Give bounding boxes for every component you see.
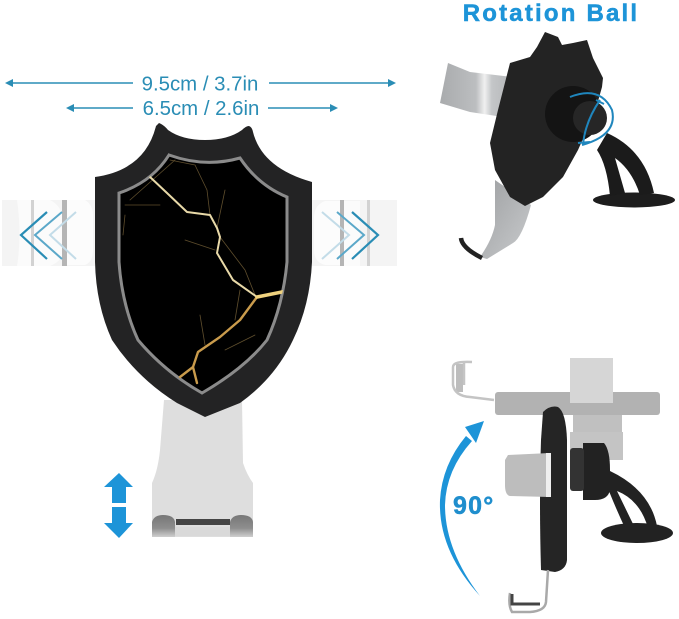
dimension: 6.5cm / 2.6in (66, 98, 338, 120)
dimension: 9.5cm / 3.7in (5, 74, 396, 96)
right clip with arrows (312, 200, 397, 266)
vertical double arrow (104, 473, 133, 538)
rotation arrows (570, 93, 613, 145)
lower silver arm (152, 400, 253, 537)
lower hook (509, 570, 548, 612)
left clip with arrows (2, 200, 95, 266)
faded horizontal position (495, 358, 660, 460)
silver clip (505, 453, 550, 497)
rotation ball (545, 86, 601, 142)
tilted mount: 90 degree view (453, 358, 673, 612)
heading: Rotation Ball: Rotation Ball (463, 0, 639, 27)
arm and base (593, 133, 675, 208)
joint (570, 443, 610, 500)
lower hook (461, 238, 482, 258)
faded left hook (453, 362, 494, 400)
back of shield (490, 32, 603, 206)
dimension: 6.5cm / 2.6in: 6.5cm / 2.6in (143, 98, 259, 120)
angled mount: rotation ball view (440, 32, 675, 259)
black plate side (540, 407, 567, 572)
marble panel (119, 155, 287, 393)
lower silver arm (480, 180, 531, 259)
dimension: 9.5cm / 3.7in: 9.5cm / 3.7in (142, 74, 258, 96)
90 degree arc arrow (440, 421, 484, 596)
upper silver clip (440, 63, 512, 118)
shield holder (95, 123, 312, 417)
label: 90°: 90° (453, 492, 494, 520)
base and arm (601, 471, 673, 543)
